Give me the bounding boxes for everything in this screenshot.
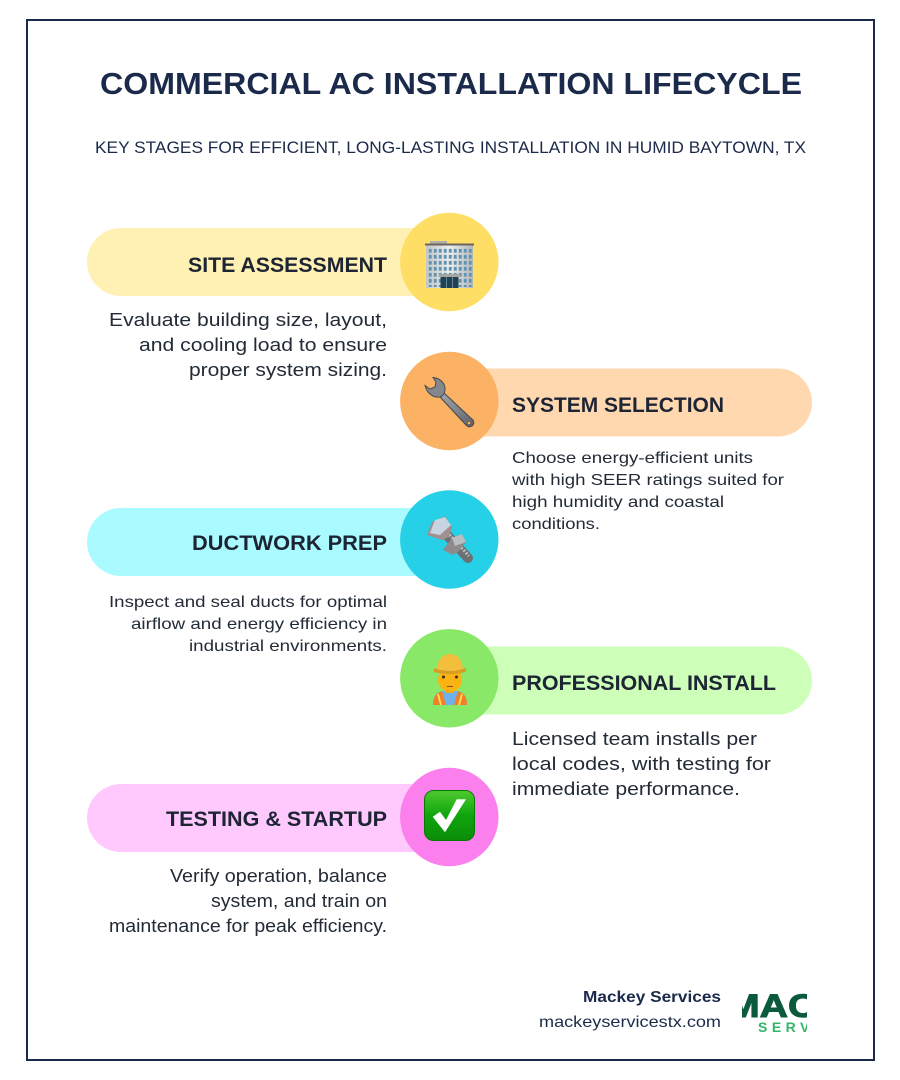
logo (742, 994, 807, 1032)
text: ductwork prep: industrial environments. (189, 638, 387, 655)
text: testing and startup: maintenance for peak efficiency. (109, 916, 387, 936)
text: system selection: Choose energy-efficient units (512, 450, 753, 467)
icon: nut and bolt (427, 516, 469, 558)
subtitle: KEY STAGES FOR EFFICIENT, LONG-LASTING INSTALLATION IN HUMID BAYTOWN, TX (95, 138, 806, 157)
icon: wrench (425, 378, 474, 427)
text: system selection: conditions. (512, 516, 600, 533)
text: site assessment: and cooling load to ensure (139, 335, 387, 355)
logo: MACKEY (727, 988, 897, 1024)
title: COMMERCIAL AC INSTALLATION LIFECYCLE (100, 66, 802, 101)
text: professional install: local codes, with testing for (512, 754, 771, 774)
heading: ductwork prep: DUCTWORK PREP (192, 532, 387, 555)
text: testing and startup: Verify operation, balance (170, 866, 387, 886)
panel: ductwork prep (87, 490, 498, 655)
heading: system selection: SYSTEM SELECTION (512, 394, 724, 417)
icon: construction worker (433, 654, 467, 705)
text: professional install: Licensed team installs per (512, 729, 757, 749)
pill: site assessment (87, 228, 449, 296)
text: ductwork prep: Inspect and seal ducts for optimal (109, 594, 387, 611)
text: system selection: high humidity and coastal (512, 494, 724, 511)
text: system selection (511, 450, 785, 533)
logo: SERVICES (758, 1019, 860, 1035)
text: site assessment: proper system sizing. (189, 360, 387, 380)
panel: testing and startup (87, 768, 498, 936)
text: site assessment (109, 310, 387, 380)
panel: system selection (400, 352, 812, 533)
icon: check mark (424, 790, 474, 840)
text: ductwork prep (109, 594, 387, 655)
heading: site assessment: SITE ASSESSMENT (188, 254, 387, 277)
icon: office building (425, 241, 474, 288)
pill: ductwork prep (87, 508, 449, 576)
pill: system selection (449, 368, 812, 436)
circle: testing and startup (400, 768, 498, 866)
pill: testing and startup (87, 784, 449, 852)
text: professional install: immediate performance. (512, 779, 740, 799)
heading: testing and startup: TESTING & STARTUP (166, 808, 387, 831)
heading: professional install: PROFESSIONAL INSTALL (512, 672, 776, 695)
text: testing and startup: system, and train on (211, 891, 387, 911)
circle: site assessment (400, 213, 498, 311)
text: professional install (512, 729, 771, 799)
text: system selection: with high SEER ratings suited for (511, 472, 785, 489)
text: testing and startup (109, 866, 387, 936)
text: ductwork prep: airflow and energy efficiency in (131, 616, 387, 633)
circle: system selection (400, 352, 498, 450)
text: site assessment: Evaluate building size, layout, (109, 310, 387, 330)
circle: professional install (400, 629, 498, 728)
circle: ductwork prep (400, 490, 498, 589)
panel: professional install (400, 629, 812, 799)
panel: site assessment (87, 213, 498, 380)
pill: professional install (449, 646, 812, 714)
footer website: mackeyservicestx.com (539, 1014, 721, 1031)
footer company name: Mackey Services (583, 989, 721, 1006)
